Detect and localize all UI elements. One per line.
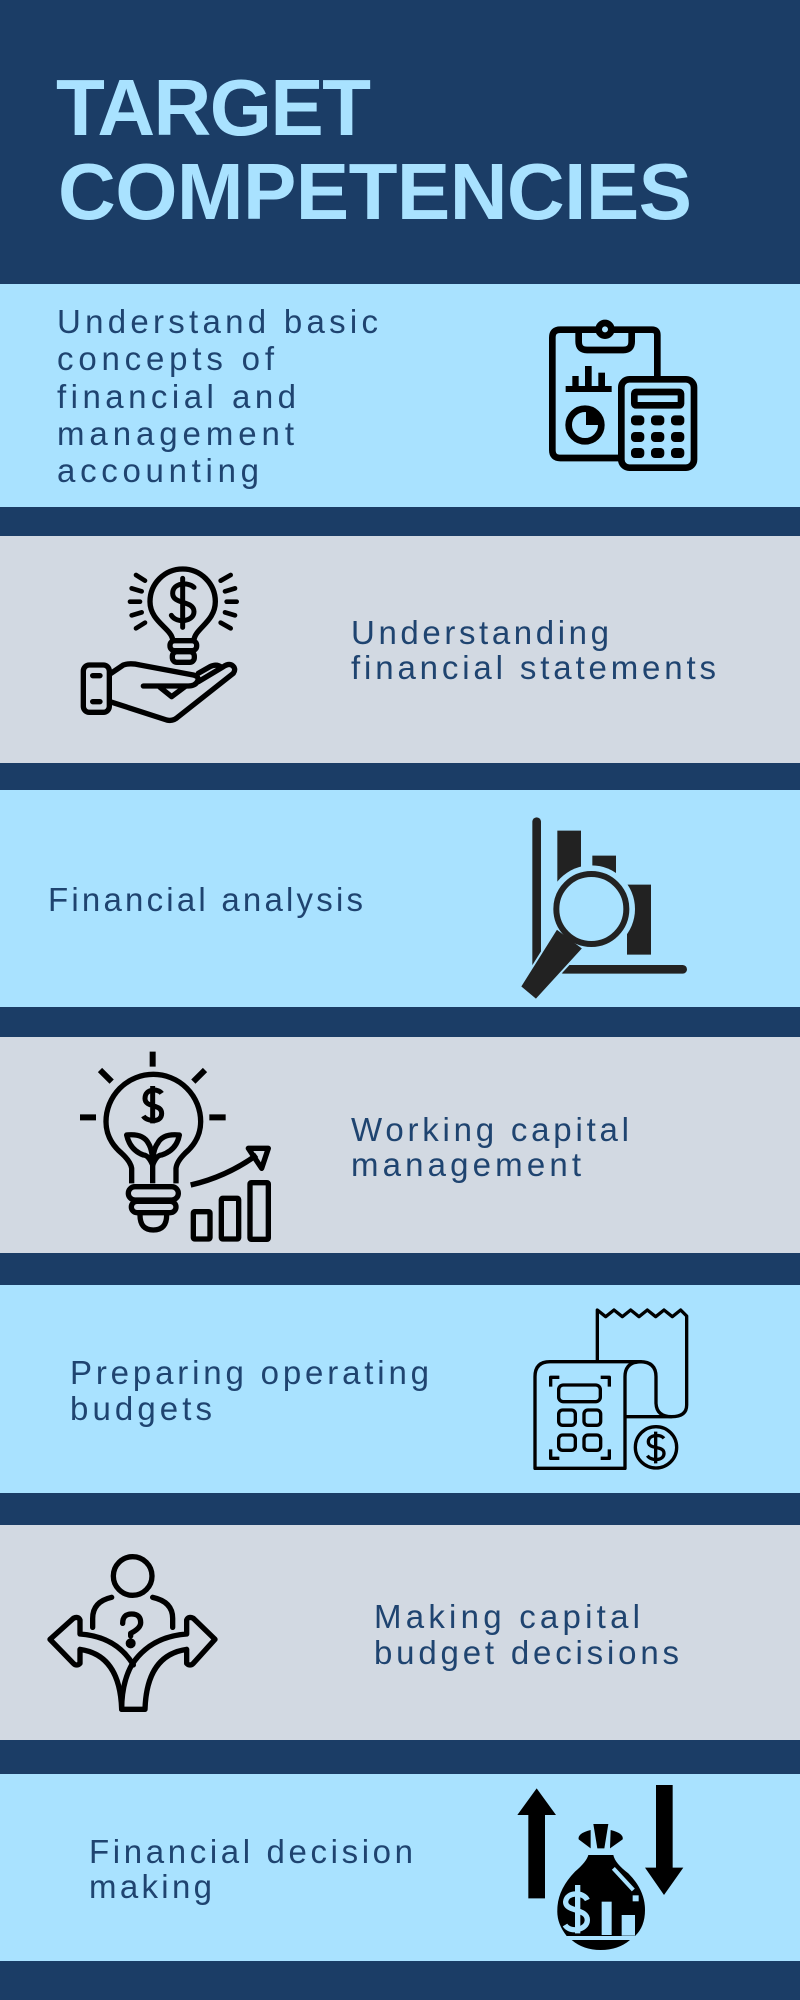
- icon: clipboard and calculator: [552, 323, 694, 468]
- panel: basic concepts: [0, 284, 800, 507]
- text: working capital: [351, 1111, 629, 1183]
- text: financial analysis: Financial analysis: [48, 881, 363, 918]
- text: financial statements: [351, 614, 716, 686]
- panel: financial decision making: [0, 1774, 800, 1961]
- text: basic concepts: financial and: [57, 378, 296, 415]
- title: COMPETENCIES: [58, 147, 692, 236]
- title: [56, 63, 692, 236]
- icon: calculator with receipt: [535, 1310, 687, 1468]
- title: TARGET: [56, 63, 371, 152]
- text: basic concepts: [57, 303, 378, 489]
- icon: bulb with plant and growth chart: [80, 1052, 268, 1239]
- icon: hand holding dollar bulb: [83, 569, 237, 720]
- text: operating budgets: budgets: [70, 1390, 212, 1427]
- icon: person at crossroads: [50, 1557, 215, 1709]
- text: financial statements: Understanding: [351, 614, 609, 651]
- text: basic concepts: accounting: [57, 452, 259, 489]
- text: operating budgets: [70, 1354, 429, 1427]
- icon: magnifier over bar chart: [520, 822, 683, 1000]
- text: capital budget decisions: [374, 1598, 679, 1671]
- icon: money bag with up and down arrows: [517, 1785, 683, 1950]
- text: basic concepts: management: [57, 415, 294, 452]
- text: basic concepts: Understand basic: [57, 303, 378, 340]
- text: financial decision making: Financial decision: [89, 1833, 413, 1870]
- text: working capital: management: [351, 1146, 581, 1183]
- panel: financial statements: [0, 536, 800, 763]
- text: capital budget decisions: Making capital: [374, 1598, 640, 1635]
- text: financial statements: financial statements: [351, 649, 716, 686]
- text: capital budget decisions: budget decisions: [374, 1634, 679, 1671]
- panel: operating budgets: [0, 1285, 800, 1493]
- text: basic concepts: concepts of: [57, 340, 275, 377]
- panel: financial analysis: [0, 790, 800, 1007]
- text: operating budgets: Preparing operating: [70, 1354, 429, 1391]
- text: working capital: Working capital: [351, 1111, 629, 1148]
- text: financial decision making: [89, 1833, 413, 1905]
- panel: capital budget decisions: [0, 1525, 800, 1740]
- panel: working capital: [0, 1037, 800, 1253]
- text: financial decision making: making: [89, 1868, 212, 1905]
